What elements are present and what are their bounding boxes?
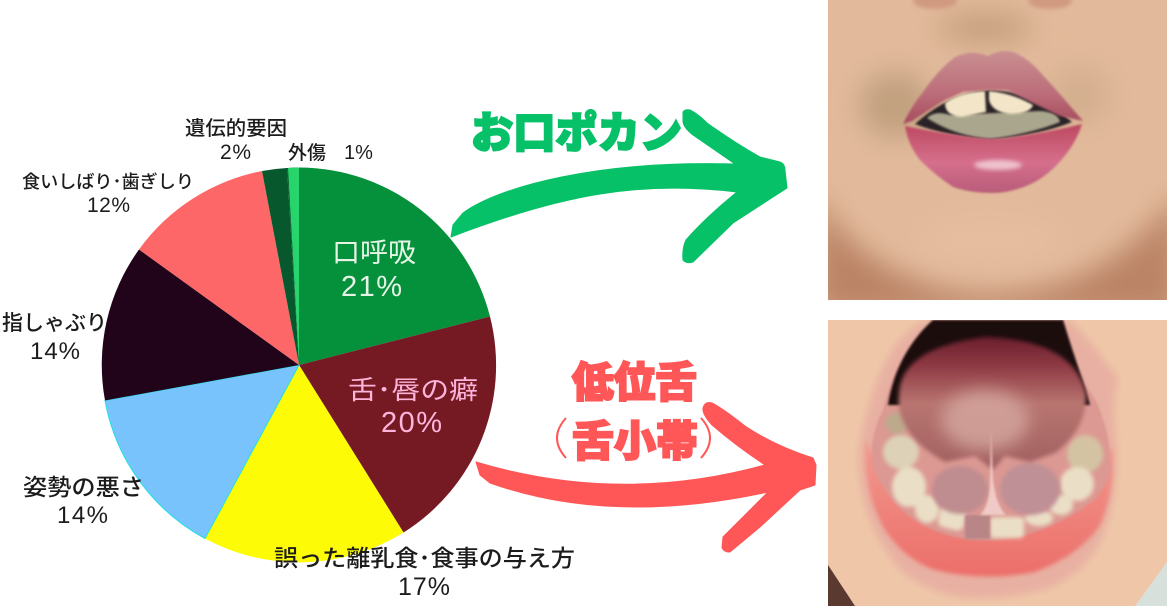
frenulum [980,430,1006,515]
lower lip [905,124,1082,193]
pie label: mouth breathing: 口呼吸 [332,238,416,268]
label: poor posture: 姿勢の悪さ [23,474,144,500]
lower teeth [927,111,1060,139]
arrow: red [476,403,816,552]
label: poor posture [23,474,144,529]
floor of mouth [932,463,1060,515]
slice: posture 14% [105,365,299,538]
label: improper feeding: 誤った離乳食･食事の与え方 [274,545,575,571]
facial shading [815,12,1167,315]
right parenthesis [701,418,710,458]
pie label: mouth breathing: 21% [341,271,402,303]
heading: lingual frenulum: 舌小帯 [572,418,698,465]
heading: open mouth: お口ポカン [471,110,682,158]
teeth left [883,412,967,532]
background corners [828,565,855,606]
pie chart [102,168,496,562]
upper lip [903,51,1083,124]
pie label: tongue and lip habits [348,375,478,439]
tongue pale patch [941,390,1029,450]
upper teeth [945,91,1033,117]
dark throat [888,320,1090,405]
label: trauma: 外傷 [288,142,326,164]
tongue [899,337,1086,470]
lower lip red [865,440,1113,577]
pie label: tongue and lip habits: 舌･唇の癖 [348,375,478,405]
slice: clenching 12% [139,171,299,365]
label: finger sucking: 14% [30,338,80,365]
slice: mouth breathing 21% [299,168,490,365]
label: genetic factors: 2% [220,141,251,164]
label: improper feeding [274,545,575,601]
slice highlight: trauma [288,168,299,365]
slice: tongue and lip habits 20% [299,316,496,532]
label: clenching and grinding: 12% [87,194,130,217]
label: clenching and grinding [22,172,194,217]
gum gap [965,515,990,539]
slice: genetic 2% [262,168,299,365]
nostrils [913,0,1072,9]
label: finger sucking [2,312,107,365]
label: genetic factors [185,117,287,164]
pie label: mouth breathing [332,238,416,303]
label: trauma: 1% [344,142,373,164]
pie label: tongue and lip habits: 20% [381,407,442,439]
arrow: green [451,110,787,263]
label: poor posture: 14% [57,502,108,529]
slice: feeding 17% [205,365,404,562]
skin [828,320,1167,606]
slice: finger sucking 14% [102,250,299,400]
outer lip [859,320,1118,598]
label: trauma [288,142,373,164]
heading: low tongue position: 低位舌 [572,359,697,406]
label: improper feeding: 17% [398,573,450,601]
slice: trauma 1% [287,168,299,365]
label: finger sucking: 指しゃぶり [2,312,107,335]
photo: under tongue [828,320,1167,606]
label: clenching and grinding: 食いしばり･歯ぎしり [22,172,194,192]
lip highlight [974,160,1022,170]
skin [828,0,1167,300]
mouth interior [915,90,1072,140]
photo: open mouth face [815,0,1167,315]
label: genetic factors: 遺伝的要因 [185,117,287,140]
left parenthesis [557,418,566,458]
mouth interior [872,320,1111,540]
teeth right [990,435,1103,538]
